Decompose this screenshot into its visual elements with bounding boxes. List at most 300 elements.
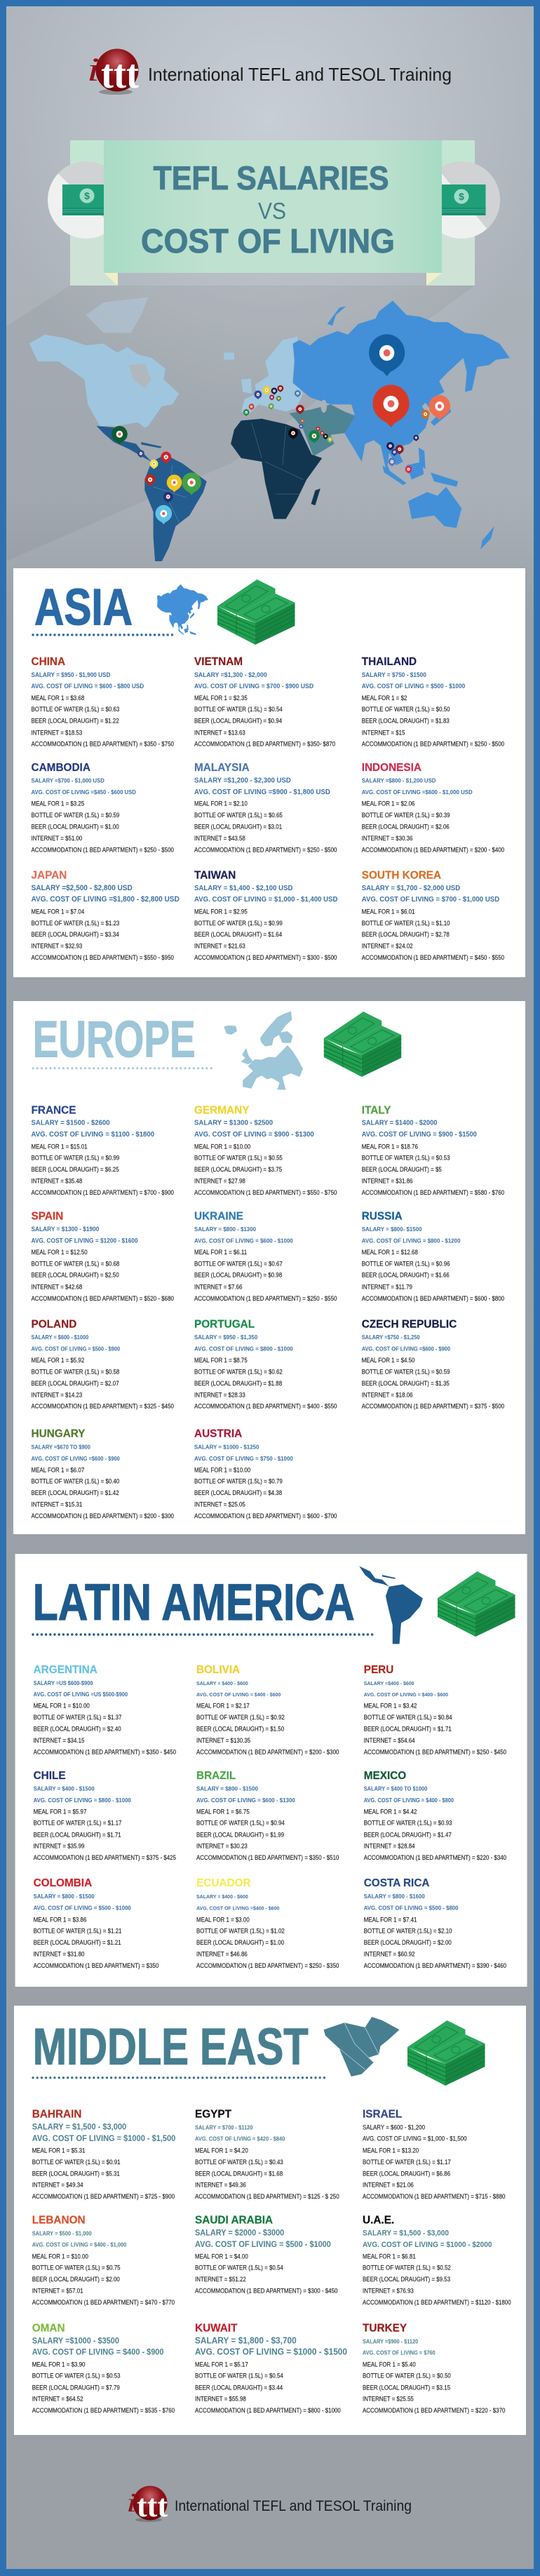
country: UAE: BOTTLE OF WATER (1.5L) = $0.52 <box>363 2264 451 2272</box>
Ecuador name: ECUADOR <box>196 1877 251 1889</box>
Hungary cost of living: AVG. COST OF LIVING =$600 - $900 <box>31 1456 120 1462</box>
country: Mexico: ACCOMMODATION (1 BED APARTMENT) = $220 - $340 <box>364 1853 506 1861</box>
Poland name: POLAND <box>31 1318 76 1331</box>
country: Bolivia: MEAL FOR 1 = $2.17 <box>196 1702 250 1710</box>
country: Poland: MEAL FOR 1 = $5.92 <box>31 1356 84 1364</box>
country: Taiwan: INTERNET = $21.63 <box>194 942 245 950</box>
country: Spain: INTERNET = $42.68 <box>31 1283 83 1291</box>
pin: Portugal <box>243 409 250 416</box>
Thailand salary: SALARY = $750 - $1500 <box>362 671 426 678</box>
South Korea salary: SALARY = $1,700 - $2,000 USD <box>362 885 460 892</box>
pin: Ecuador <box>150 459 158 469</box>
country: Brazil <box>196 1770 339 1861</box>
country: Indonesia: MEAL FOR 1 = $2.06 <box>362 800 415 807</box>
country: Indonesia: BEER (LOCAL DRAUGHT) = $2.06 <box>362 823 450 831</box>
pin: Malaysia <box>389 458 396 467</box>
pin: Cambodia <box>391 449 398 456</box>
Italy cost of living: AVG. COST OF LIVING = $900 - $1500 <box>362 1131 477 1139</box>
country: Costa Rica <box>364 1877 506 1969</box>
country: Saudi Arabia <box>195 2214 338 2295</box>
UAE cost of living: AVG. COST OF LIVING = $1000 - $2000 <box>363 2241 492 2249</box>
Costa Rica salary: SALARY = $800 - $1600 <box>364 1893 425 1900</box>
country: Israel: MEAL FOR 1 = $13.20 <box>363 2147 419 2154</box>
Czech Republic cost of living: AVG. COST OF LIVING =$600 - $900 <box>362 1346 450 1353</box>
Ukraine cost of living: AVG. COST OF LIVING = $600 - $1000 <box>194 1237 293 1245</box>
country: Malaysia <box>194 762 337 854</box>
Russia name: RUSSIA <box>362 1210 403 1223</box>
China cost of living: AVG. COST OF LIVING = $600 - $800 USD <box>31 683 144 690</box>
country: Oman: BEER (LOCAL DRAUGHT) = $7.79 <box>32 2384 120 2391</box>
country: South Korea: BOTTLE OF WATER (1.5L) = $1.10 <box>362 919 450 927</box>
Vietnam cost of living: AVG. COST OF LIVING = $700 - $900 USD <box>194 683 314 690</box>
Russia cost of living: AVG. COST OF LIVING = $800 - $1200 <box>362 1237 461 1245</box>
icon: Europe map <box>224 1012 303 1089</box>
logo: ITTT header <box>87 49 452 97</box>
logo: ITTT header: International TEFL and TESOL Training <box>148 64 452 85</box>
country: Cambodia: MEAL FOR 1 = $3.25 <box>31 800 84 807</box>
country: Poland: ACCOMMODATION (1 BED APARTMENT) = $325 - $450 <box>31 1402 174 1410</box>
pin: Poland <box>277 385 283 392</box>
logo: ITTT footer: International TEFL and TESOL Training <box>175 2498 412 2514</box>
Czech Republic name: CZECH REPUBLIC <box>362 1318 457 1331</box>
country: Argentina: ACCOMMODATION (1 BED APARTMENT) = $350 - $450 <box>34 1748 176 1755</box>
icon: right money badge: $ <box>459 191 464 202</box>
Argentina cost of living: AVG. COST OF LIVING =US $500-$900 <box>34 1691 128 1698</box>
Germany cost of living: AVG. COST OF LIVING = $900 - $1300 <box>194 1131 314 1139</box>
country: Mexico: INTERNET = $28.84 <box>364 1842 415 1850</box>
Italy salary: SALARY = $1400 - $2000 <box>362 1119 437 1127</box>
Israel salary: SALARY = $600 - $1,200 <box>363 2124 425 2131</box>
Brazil salary: SALARY = $800 - $1500 <box>196 1785 258 1792</box>
country: Czech Republic: BOTTLE OF WATER (1.5L) = $0.59 <box>362 1368 450 1375</box>
country: Ecuador: INTERNET = $46.86 <box>196 1950 248 1957</box>
country: UAE: INTERNET = $76.93 <box>363 2287 414 2295</box>
country: Poland: BEER (LOCAL DRAUGHT) = $2.07 <box>31 1379 119 1387</box>
country: Russia <box>362 1210 504 1302</box>
pin: Mexico <box>112 426 128 445</box>
Ecuador cost of living: AVG. COST OF LIVING =$400 - $600 <box>196 1905 279 1912</box>
Brazil cost of living: AVG. COST OF LIVING = $600 - $1300 <box>196 1797 295 1804</box>
country: Turkey: ACCOMMODATION (1 BED APARTMENT) = $220 - $370 <box>363 2406 506 2414</box>
Argentina name: ARGENTINA <box>34 1664 97 1676</box>
Spain cost of living: AVG. COST OF LIVING = $1200 - $1600 <box>31 1237 138 1245</box>
country: Portugal: BOTTLE OF WATER (1.5L) = $0.62 <box>194 1368 283 1375</box>
country: Oman: MEAL FOR 1 = $3.90 <box>32 2361 86 2368</box>
country: Vietnam: INTERNET = $13.63 <box>194 729 245 736</box>
country: Germany <box>194 1104 337 1196</box>
country: Vietnam <box>194 656 335 748</box>
country: Brazil: INTERNET = $30.23 <box>196 1842 248 1850</box>
country: Cambodia: BEER (LOCAL DRAUGHT) = $1.00 <box>31 823 119 831</box>
pin: Taiwan <box>413 435 419 441</box>
heading: Europe: EUROPE <box>33 1012 196 1068</box>
country: Malaysia: BOTTLE OF WATER (1.5L) = $0.65 <box>194 811 283 819</box>
Malaysia salary: SALARY =$1,200 - $2,300 USD <box>194 777 291 785</box>
Hungary salary: SALARY =$670 TO $900 <box>31 1444 90 1451</box>
Chile cost of living: AVG. COST OF LIVING = $800 - $1000 <box>34 1797 131 1804</box>
country: Argentina: INTERNET = $34.15 <box>34 1736 85 1744</box>
country: Brazil: ACCOMMODATION (1 BED APARTMENT) = $350 - $510 <box>196 1853 339 1861</box>
France name: FRANCE <box>31 1104 76 1117</box>
country: Russia: BEER (LOCAL DRAUGHT) = $1.66 <box>362 1271 450 1279</box>
world map with location pins <box>29 297 510 561</box>
country: Bahrain: BOTTLE OF WATER (1.5L) = $0.91 <box>32 2158 121 2166</box>
country: Malaysia: BEER (LOCAL DRAUGHT) = $3.01 <box>194 823 282 831</box>
Italy name: ITALY <box>362 1104 391 1117</box>
country: Italy <box>362 1104 504 1196</box>
Kuwait name: KUWAIT <box>195 2322 238 2335</box>
pin: Indonesia <box>405 466 412 474</box>
pin: Hungary <box>276 396 281 401</box>
pin: Russia <box>369 335 405 376</box>
country: Chile: BEER (LOCAL DRAUGHT) = $1.71 <box>34 1831 121 1838</box>
country: Bahrain <box>32 2108 175 2200</box>
Cambodia salary: SALARY =$700 - $1,000 USD <box>31 777 104 784</box>
Germany salary: SALARY = $1300 - $2500 <box>194 1119 274 1127</box>
country: Poland: INTERNET = $14.23 <box>31 1391 83 1398</box>
Kuwait salary: SALARY = $1,800 - $3,700 <box>195 2335 297 2345</box>
country: Ecuador: BOTTLE OF WATER (1.5L) = $1.02 <box>196 1927 285 1935</box>
logo: ITTT footer <box>126 2486 412 2523</box>
country: Austria: BOTTLE OF WATER (1.5L) = $0.79 <box>194 1477 283 1485</box>
Turkey salary: SALARY =$900 - $1120 <box>363 2338 418 2344</box>
country: Indonesia: BOTTLE OF WATER (1.5L) = $0.39 <box>362 811 450 819</box>
Brazil name: BRAZIL <box>196 1770 236 1782</box>
country: Czech Republic <box>362 1318 504 1410</box>
icon: right money badge <box>442 161 500 239</box>
title ribbon banner <box>48 140 500 393</box>
icon: left money badge <box>48 161 104 239</box>
pin: Austria <box>269 395 274 401</box>
pin: Turkey <box>296 405 304 415</box>
Taiwan cost of living: AVG. COST OF LIVING = $1,000 - $1,400 USD <box>194 896 338 904</box>
pin: South Korea <box>421 410 430 420</box>
country: Ukraine: INTERNET = $7.66 <box>194 1283 243 1291</box>
country: Peru: INTERNET = $54.64 <box>364 1736 415 1744</box>
country: Malaysia: INTERNET = $43.58 <box>194 834 245 842</box>
pin: Chile <box>163 492 173 503</box>
country: Thailand <box>362 656 504 748</box>
country: Lebanon <box>32 2214 175 2306</box>
France salary: SALARY = $1500 - $2600 <box>31 1119 110 1127</box>
Chile name: CHILE <box>34 1770 66 1782</box>
country: Indonesia: ACCOMMODATION (1 BED APARTMENT) = $200 - $400 <box>362 846 504 854</box>
country: Mexico: BEER (LOCAL DRAUGHT) = $1.47 <box>364 1831 452 1838</box>
country: Austria: ACCOMMODATION (1 BED APARTMENT) = $600 - $700 <box>194 1512 337 1520</box>
country: Lebanon: ACCOMMODATION (1 BED APARTMENT) = $470 - $770 <box>32 2298 175 2306</box>
country: Bahrain: BEER (LOCAL DRAUGHT) = $5.31 <box>32 2170 120 2177</box>
country: Poland: BOTTLE OF WATER (1.5L) = $0.58 <box>31 1368 120 1375</box>
country: Germany: BOTTLE OF WATER (1.5L) = $0.55 <box>194 1154 283 1162</box>
pin: Saudi Arabia <box>309 430 320 443</box>
Egypt name: EGYPT <box>195 2108 231 2121</box>
pin: Israel <box>299 424 303 429</box>
Israel cost of living: AVG. COST OF LIVING = $1,000 - $1,500 <box>363 2135 467 2142</box>
country: Costa Rica: ACCOMMODATION (1 BED APARTMENT) = $390 - $460 <box>364 1961 506 1969</box>
country: Oman: ACCOMMODATION (1 BED APARTMENT) = $535 - $760 <box>32 2406 175 2414</box>
pin: Egypt <box>288 428 298 439</box>
country: Hungary: INTERNET = $15.31 <box>31 1501 83 1508</box>
country: Ukraine: BOTTLE OF WATER (1.5L) = $0.67 <box>194 1260 283 1267</box>
country: Saudi Arabia: ACCOMMODATION (1 BED APARTMENT) = $300 - $450 <box>195 2287 338 2295</box>
country: Russia: MEAL FOR 1 = $12.68 <box>362 1248 418 1256</box>
country: Malaysia: ACCOMMODATION (1 BED APARTMENT) = $250 - $500 <box>194 846 337 854</box>
country: Japan: BOTTLE OF WATER (1.5L) = $1.23 <box>31 919 120 927</box>
country: South Korea: BEER (LOCAL DRAUGHT) = $2.78 <box>362 931 450 938</box>
country: Vietnam: BOTTLE OF WATER (1.5L) = $0.54 <box>194 706 283 713</box>
country: Austria: INTERNET = $25.05 <box>194 1501 245 1508</box>
country: Ecuador: BEER (LOCAL DRAUGHT) = $1.00 <box>196 1938 284 1946</box>
country: Bolivia: ACCOMMODATION (1 BED APARTMENT) = $200 - $300 <box>196 1748 339 1755</box>
pin: Vietnam <box>396 445 404 455</box>
country: France: INTERNET = $35.48 <box>31 1177 83 1185</box>
pin: Spain <box>249 404 255 410</box>
country: Bolivia <box>196 1664 339 1755</box>
country: Portugal: BEER (LOCAL DRAUGHT) = $1.88 <box>194 1379 282 1387</box>
Ecuador salary: SALARY = $400 - $600 <box>196 1893 248 1900</box>
pin: Kuwait <box>320 431 324 436</box>
country: Spain: MEAL FOR 1 = $12.50 <box>31 1248 88 1256</box>
Argentina salary: SALARY =US $600-$900 <box>34 1680 93 1686</box>
icon: Middle East map <box>324 2017 400 2077</box>
country: Ukraine: ACCOMMODATION (1 BED APARTMENT) = $250 - $550 <box>194 1294 337 1302</box>
Malaysia name: MALAYSIA <box>194 762 250 774</box>
South Korea name: SOUTH KOREA <box>362 869 441 882</box>
pin: Peru <box>145 474 156 486</box>
Lebanon name: LEBANON <box>32 2214 86 2227</box>
country: Bolivia: BOTTLE OF WATER (1.5L) = $0.92 <box>196 1713 285 1721</box>
country: Saudi Arabia: MEAL FOR 1 = $4.00 <box>195 2253 248 2260</box>
country: Thailand: BOTTLE OF WATER (1.5L) = $0.50 <box>362 706 450 713</box>
country: Germany: MEAL FOR 1 = $10.00 <box>194 1143 250 1150</box>
country: Taiwan <box>194 869 338 961</box>
country: Taiwan: BEER (LOCAL DRAUGHT) = $1.64 <box>194 931 282 938</box>
heading: Latin America: LATIN AMERICA <box>33 1574 355 1631</box>
Japan cost of living: AVG. COST OF LIVING =$1,800 - $2,800 USD <box>31 896 180 904</box>
country: Turkey <box>363 2322 506 2414</box>
heading: TEFL Salaries vs Cost of Living: VS <box>258 198 286 224</box>
Bahrain salary: SALARY = $1,500 - $3,000 <box>32 2123 126 2132</box>
country: Saudi Arabia: BOTTLE OF WATER (1.5L) = $0.54 <box>195 2264 283 2272</box>
icon: money stack <box>324 1012 401 1077</box>
country: Argentina: MEAL FOR 1 = $10.00 <box>34 1702 90 1710</box>
pin: Costa Rica <box>137 450 144 458</box>
pin: Brazil <box>182 472 201 495</box>
country: Kuwait: BOTTLE OF WATER (1.5L) = $0.54 <box>195 2372 283 2380</box>
country: France: MEAL FOR 1 = $15.01 <box>31 1143 88 1150</box>
country: South Korea: INTERNET = $24.02 <box>362 942 413 950</box>
country: Colombia <box>34 1877 159 1969</box>
country: Oman: INTERNET = $64.52 <box>32 2395 83 2403</box>
Poland salary: SALARY = $600 - $1000 <box>31 1334 88 1341</box>
country: Bahrain: INTERNET = $49.34 <box>32 2181 83 2189</box>
Russia salary: SALARY = $800- $1500 <box>362 1226 422 1233</box>
country: Ukraine <box>194 1210 337 1302</box>
country: Peru: BEER (LOCAL DRAUGHT) = $1.71 <box>364 1725 452 1732</box>
country: Russia: ACCOMMODATION (1 BED APARTMENT) = $600 - $800 <box>362 1294 504 1302</box>
country: South Korea: ACCOMMODATION (1 BED APARTMENT) = $450 - $550 <box>362 953 504 961</box>
country: Peru: ACCOMMODATION (1 BED APARTMENT) = $250 - $450 <box>364 1748 506 1755</box>
Bolivia salary: SALARY = $400 - $600 <box>196 1680 248 1686</box>
Indonesia name: INDONESIA <box>362 762 421 774</box>
country: Italy: BOTTLE OF WATER (1.5L) = $0.53 <box>362 1154 450 1162</box>
Egypt salary: SALARY = $700 - $1120 <box>195 2124 252 2131</box>
pin: Bahrain <box>316 427 320 431</box>
Peru salary: SALARY =$400 - $600 <box>364 1680 414 1686</box>
country: UAE: ACCOMMODATION (1 BED APARTMENT) = $1120 - $1800 <box>363 2298 511 2306</box>
country: China: MEAL FOR 1 = $3.68 <box>31 694 84 702</box>
country: Russia: INTERNET = $11.79 <box>362 1283 412 1291</box>
Vietnam name: VIETNAM <box>194 656 243 668</box>
country: Mexico <box>364 1770 506 1861</box>
country: Brazil: MEAL FOR 1 = $6.75 <box>196 1808 250 1815</box>
country: Taiwan: ACCOMMODATION (1 BED APARTMENT) = $300 - $500 <box>194 953 337 961</box>
country: Egypt: BEER (LOCAL DRAUGHT) = $1.68 <box>195 2170 283 2177</box>
panel: Latin America <box>15 1554 527 1987</box>
China name: CHINA <box>31 656 65 668</box>
Cambodia cost of living: AVG. COST OF LIVING =$450 - $600 USD <box>31 789 136 796</box>
country: Chile: MEAL FOR 1 = $5.97 <box>34 1808 87 1815</box>
pin: Czech Republic <box>271 388 277 395</box>
country: Chile: ACCOMMODATION (1 BED APARTMENT) = $375 - $425 <box>34 1853 176 1861</box>
country: Egypt: BOTTLE OF WATER (1.5L) = $0.43 <box>195 2158 283 2166</box>
country: China: ACCOMMODATION (1 BED APARTMENT) = $350 - $750 <box>31 740 174 748</box>
country: Lebanon: INTERNET = $57.01 <box>32 2287 83 2295</box>
Colombia salary: SALARY = $800 - $1500 <box>34 1893 95 1900</box>
country: Germany: INTERNET = $27.98 <box>194 1177 245 1185</box>
country: France: BEER (LOCAL DRAUGHT) = $6.25 <box>31 1165 119 1173</box>
Spain name: SPAIN <box>31 1210 63 1223</box>
country: Argentina: BOTTLE OF WATER (1.5L) = $1.37 <box>34 1713 122 1721</box>
pin: Bolivia <box>167 475 182 492</box>
country: Taiwan: MEAL FOR 1 = $2.95 <box>194 908 248 915</box>
country: Chile <box>34 1770 176 1861</box>
Cambodia name: CAMBODIA <box>31 762 90 774</box>
Lebanon salary: SALARY = $500 - $1,000 <box>32 2230 92 2237</box>
panel: Europe <box>13 1001 525 1534</box>
Taiwan name: TAIWAN <box>194 869 236 882</box>
country: Costa Rica: BOTTLE OF WATER (1.5L) = $2.10 <box>364 1927 452 1935</box>
Turkey name: TURKEY <box>363 2322 407 2335</box>
country: Thailand: INTERNET = $15 <box>362 729 405 736</box>
country: Ukraine: BEER (LOCAL DRAUGHT) = $0.98 <box>194 1271 282 1279</box>
country: Ukraine: MEAL FOR 1 = $6.11 <box>194 1248 247 1256</box>
country: Indonesia <box>362 762 504 854</box>
country: Colombia: BEER (LOCAL DRAUGHT) = $1.21 <box>34 1938 121 1946</box>
Ukraine name: UKRAINE <box>194 1210 243 1223</box>
country: Oman <box>32 2322 175 2414</box>
country: Cambodia: BOTTLE OF WATER (1.5L) = $0.59 <box>31 811 120 819</box>
country: Spain: ACCOMMODATION (1 BED APARTMENT) = $520 - $680 <box>31 1294 174 1302</box>
country: UAE: MEAL FOR 1 = $6.81 <box>363 2253 416 2260</box>
country: Egypt: ACCOMMODATION (1 BED APARTMENT) = $125 - $ 250 <box>195 2192 339 2200</box>
country: Vietnam: ACCOMMODATION (1 BED APARTMENT) = $350- $870 <box>194 740 335 748</box>
Thailand cost of living: AVG. COST OF LIVING = $500 - $1000 <box>362 683 465 690</box>
country: Portugal: INTERNET = $28.33 <box>194 1391 245 1398</box>
country: Colombia: INTERNET = $31.80 <box>34 1950 85 1957</box>
country: Japan: BEER (LOCAL DRAUGHT) = $3.34 <box>31 931 119 938</box>
Mexico name: MEXICO <box>364 1770 406 1782</box>
country: Ecuador: ACCOMMODATION (1 BED APARTMENT) = $250 - $350 <box>196 1961 339 1969</box>
country: Portugal: ACCOMMODATION (1 BED APARTMENT) = $400 - $550 <box>194 1402 337 1410</box>
country: UAE <box>363 2214 511 2306</box>
country: Thailand: MEAL FOR 1 = $2 <box>362 694 407 702</box>
country: France: ACCOMMODATION (1 BED APARTMENT) = $700 - $900 <box>31 1188 174 1196</box>
Chile salary: SALARY = $400 - $1500 <box>34 1785 95 1792</box>
icon: money stack <box>217 579 295 645</box>
country: Mexico: MEAL FOR 1 = $4.42 <box>364 1808 417 1815</box>
Hungary name: HUNGARY <box>31 1428 86 1440</box>
country: Czech Republic: ACCOMMODATION (1 BED APARTMENT) = $375 - $500 <box>362 1402 504 1410</box>
country: Russia: BOTTLE OF WATER (1.5L) = $0.96 <box>362 1260 450 1267</box>
pin: Ukraine <box>295 390 301 397</box>
pin: Oman <box>328 436 332 443</box>
pin: Japan <box>429 395 450 420</box>
country: Israel: ACCOMMODATION (1 BED APARTMENT) = $715 - $880 <box>363 2192 506 2200</box>
Spain salary: SALARY = $1300 - $1900 <box>31 1226 100 1233</box>
country: Czech Republic: BEER (LOCAL DRAUGHT) = $1.35 <box>362 1379 450 1387</box>
country: Bahrain: MEAL FOR 1 = $5.31 <box>32 2147 86 2154</box>
country: Colombia: BOTTLE OF WATER (1.5L) = $1.21 <box>34 1927 122 1935</box>
country: China: BEER (LOCAL DRAUGHT) = $1.22 <box>31 717 119 725</box>
pin: France <box>255 391 262 399</box>
Ukraine salary: SALARY = $800 - $1300 <box>194 1226 256 1233</box>
Austria salary: SALARY = $1000 - $1250 <box>194 1444 259 1451</box>
country: Poland <box>31 1318 174 1410</box>
country: Mexico: BOTTLE OF WATER (1.5L) = $0.93 <box>364 1819 452 1827</box>
country: Peru: MEAL FOR 1 = $3.42 <box>364 1702 417 1710</box>
country: Taiwan: BOTTLE OF WATER (1.5L) = $0.99 <box>194 919 283 927</box>
icon: Latin America map <box>359 1566 423 1644</box>
Portugal cost of living: AVG. COST OF LIVING = $800 - $1000 <box>194 1346 293 1353</box>
Oman cost of living: AVG. COST OF LIVING = $400 - $900 <box>32 2348 163 2357</box>
country: Costa Rica: MEAL FOR 1 = $7.41 <box>364 1916 417 1923</box>
country: Turkey: MEAL FOR 1 = $5.40 <box>363 2361 416 2368</box>
country: Costa Rica: INTERNET = $60.92 <box>364 1950 415 1957</box>
country: Germany: ACCOMMODATION (1 BED APARTMENT) = $550 - $750 <box>194 1188 337 1196</box>
country: South Korea: MEAL FOR 1 = $6.01 <box>362 908 415 915</box>
country: Lebanon: BEER (LOCAL DRAUGHT) = $2.00 <box>32 2275 120 2283</box>
South Korea cost of living: AVG. COST OF LIVING = $700 - $1,000 USD <box>362 896 499 904</box>
Saudi Arabia cost of living: AVG. COST OF LIVING = $500 - $1000 <box>195 2241 331 2249</box>
Oman salary: SALARY =$1000 - $3500 <box>32 2337 119 2345</box>
country: Portugal <box>194 1318 337 1410</box>
Colombia name: COLOMBIA <box>34 1877 92 1889</box>
panel: Middle East <box>14 2006 526 2435</box>
Saudi Arabia name: SAUDI ARABIA <box>195 2214 273 2227</box>
country: Thailand: BEER (LOCAL DRAUGHT) = $1.83 <box>362 717 450 725</box>
country: Japan: INTERNET = $32.93 <box>31 942 83 950</box>
country: Czech Republic: MEAL FOR 1 = $4.50 <box>362 1356 415 1364</box>
heading: TEFL Salaries vs Cost of Living: COST OF LIVING <box>141 223 395 260</box>
country: Ecuador <box>196 1877 339 1969</box>
country: Cambodia: ACCOMMODATION (1 BED APARTMENT) = $250 - $500 <box>31 846 174 854</box>
country: Israel: INTERNET = $21.06 <box>363 2181 414 2189</box>
country: Turkey: BOTTLE OF WATER (1.5L) = $0.50 <box>363 2372 451 2380</box>
heading: TEFL Salaries vs Cost of Living <box>141 159 395 260</box>
France cost of living: AVG. COST OF LIVING = $1100 - $1800 <box>31 1131 155 1139</box>
country: Thailand: ACCOMMODATION (1 BED APARTMENT) = $250 - $500 <box>362 740 504 748</box>
Saudi Arabia salary: SALARY = $2000 - $3000 <box>195 2229 284 2237</box>
country: Kuwait: BEER (LOCAL DRAUGHT) = $3.44 <box>195 2384 283 2391</box>
Costa Rica name: COSTA RICA <box>364 1877 430 1889</box>
country: Hungary <box>31 1428 174 1520</box>
Taiwan salary: SALARY = $1,400 - $2,100 USD <box>194 885 292 892</box>
country: Colombia: ACCOMMODATION (1 BED APARTMENT) = $350 <box>34 1961 159 1969</box>
country: Austria: MEAL FOR 1 = $10.00 <box>194 1466 250 1473</box>
country: Costa Rica: BEER (LOCAL DRAUGHT) = $2.00 <box>364 1938 452 1946</box>
country: Lebanon: MEAL FOR 1 = $10.00 <box>32 2253 88 2260</box>
